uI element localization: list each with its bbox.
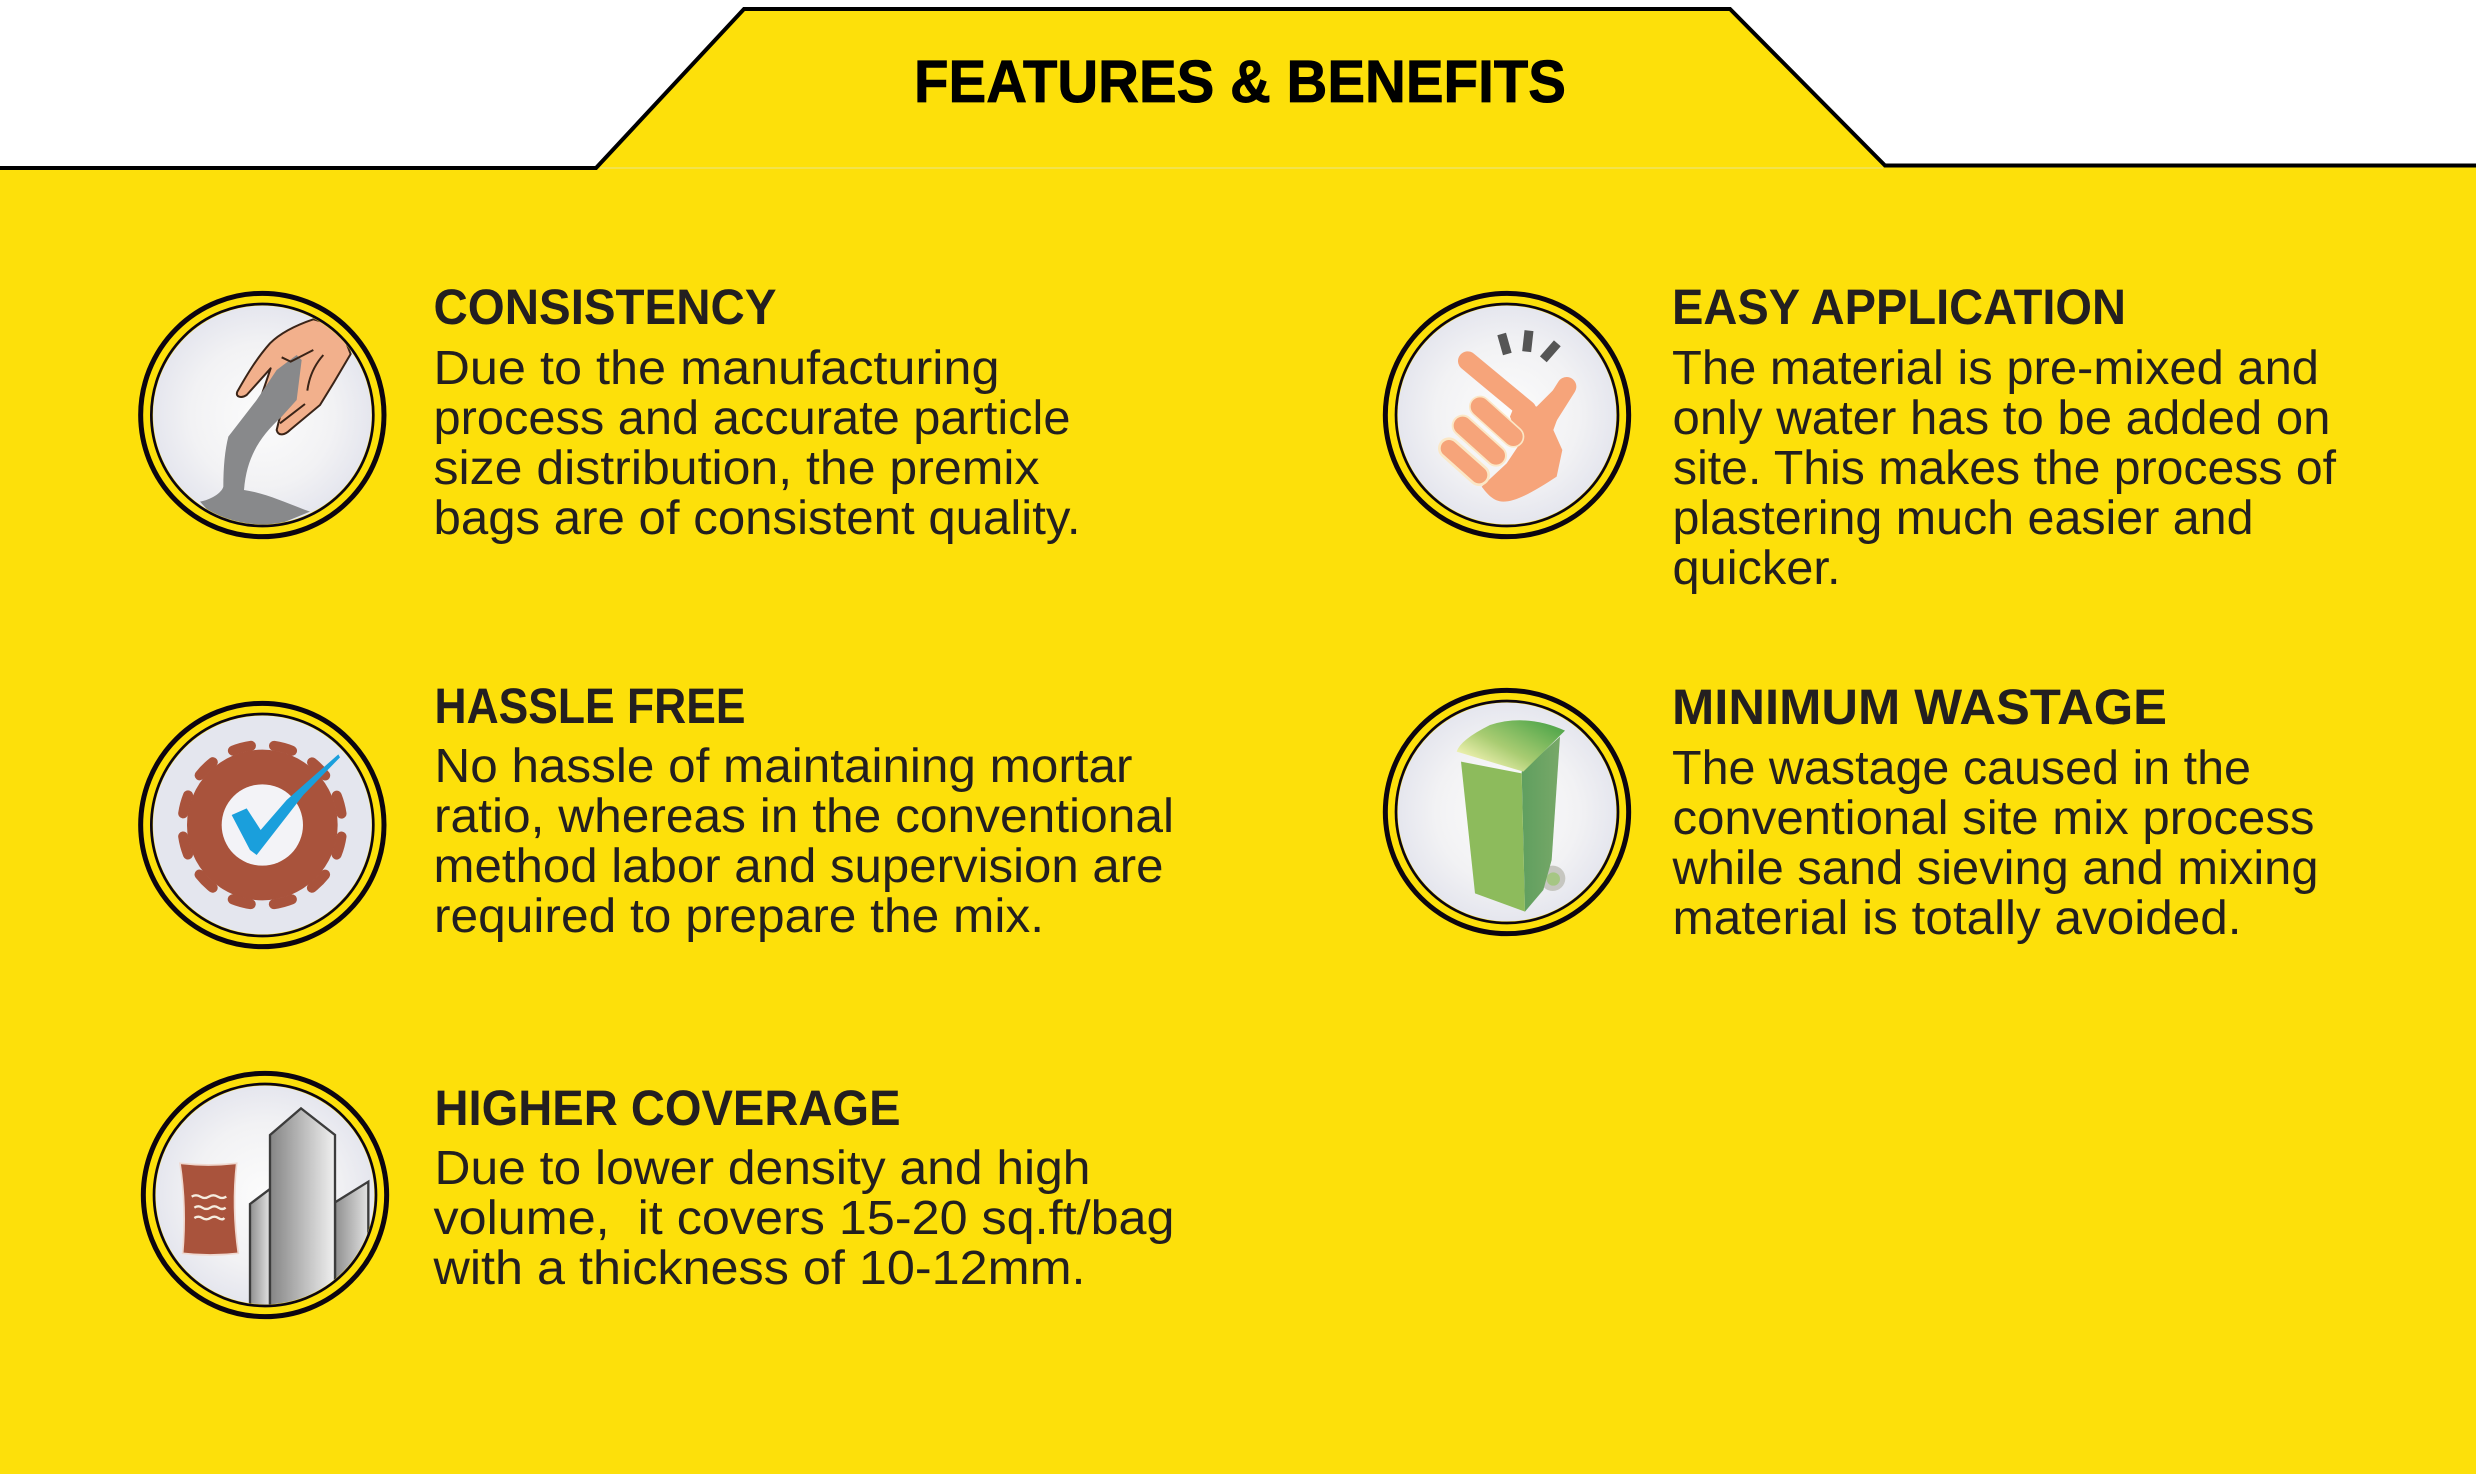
heading: MINIMUM WASTAGE [1672, 679, 2167, 735]
heading: CONSISTENCY [434, 279, 776, 335]
description: required to prepare the mix. [434, 890, 1044, 943]
description: bags are of consistent quality. [434, 492, 1080, 545]
description: material is totally avoided. [1672, 892, 2242, 945]
description: No hassle of maintaining mortar [434, 740, 1133, 793]
icon: gear with check mark [141, 703, 384, 947]
description [1671, 742, 2318, 945]
description: site. This makes the process of [1673, 442, 2337, 495]
icon: bag and silos [143, 1073, 387, 1317]
description [434, 740, 1174, 943]
description: process and accurate particle [434, 392, 1070, 445]
description: conventional site mix process [1672, 792, 2314, 845]
description [1672, 342, 2337, 595]
description: while sand sieving and mixing [1671, 842, 2318, 895]
feature: higher coverage [143, 1073, 1175, 1317]
icon: green wheelie bin [1385, 690, 1629, 934]
description: Due to the manufacturing [434, 342, 1000, 395]
heading: HIGHER COVERAGE [434, 1080, 900, 1136]
description: with a thickness of 10-12mm. [432, 1242, 1086, 1295]
description: The wastage caused in the [1672, 742, 2251, 795]
description: The material is pre-mixed and [1672, 342, 2319, 395]
description: only water has to be added on [1672, 392, 2330, 445]
title: FEATURES & BENEFITS [914, 48, 1566, 115]
heading: HASSLE FREE [434, 678, 746, 734]
feature: minimum wastage [1385, 679, 2318, 945]
icon: snapping hand [1385, 293, 1629, 537]
description: Due to lower density and high [434, 1142, 1090, 1195]
description: method labor and supervision are [434, 840, 1164, 893]
icon: hand pouring powder [141, 293, 384, 537]
feature: consistency [141, 279, 1080, 545]
description: volume, it covers 15-20 sq.ft/bag [434, 1192, 1174, 1245]
heading: EASY APPLICATION [1672, 279, 2126, 335]
description: ratio, whereas in the conventional [434, 790, 1174, 843]
description: plastering much easier and [1672, 492, 2254, 545]
feature: hassle free [141, 678, 1174, 947]
description: size distribution, the premix [434, 442, 1040, 495]
feature: easy application [1385, 279, 2337, 595]
description [434, 342, 1080, 545]
description: quicker. [1672, 542, 1840, 595]
description [432, 1142, 1175, 1295]
